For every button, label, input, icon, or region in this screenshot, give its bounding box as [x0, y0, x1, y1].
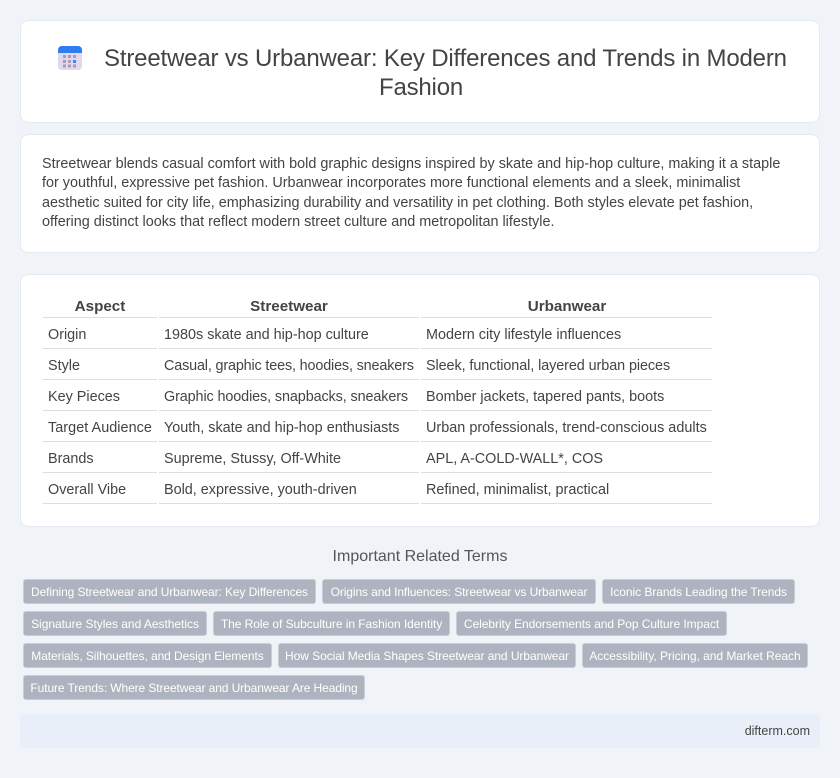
comparison table: Target Audience — [48, 420, 152, 436]
comparison table: Urbanwear — [528, 298, 606, 315]
intro panel — [20, 134, 820, 253]
comparison table: Bold, expressive, youth-driven — [164, 482, 357, 498]
comparison table: Casual, graphic tees, hoodies, sneakers — [164, 358, 414, 374]
related term tags: Materials, Silhouettes, and Design Elements — [31, 649, 264, 663]
comparison table: Style — [48, 358, 80, 374]
title: Fashion — [379, 74, 463, 101]
comparison table: Graphic hoodies, snapbacks, sneakers — [164, 389, 408, 405]
intro text — [42, 156, 780, 230]
comparison table: Urban professionals, trend-conscious adults — [426, 420, 707, 436]
title: Streetwear vs Urbanwear: Key Differences and Trends in Modern — [104, 45, 787, 72]
header card — [20, 20, 820, 123]
comparison table — [43, 298, 712, 504]
related term tags: Celebrity Endorsements and Pop Culture Impact — [464, 617, 719, 631]
comparison table: Streetwear — [250, 298, 328, 315]
comparison table: Origin — [48, 327, 86, 343]
intro text: offering distinct looks that reflect modern street culture and metropolitan lifestyle. — [42, 214, 554, 230]
related term tags: Accessibility, Pricing, and Market Reach — [589, 649, 801, 663]
comparison table: Modern city lifestyle influences — [426, 327, 621, 343]
comparison table: Supreme, Stussy, Off-White — [164, 451, 341, 467]
comparison table: Sleek, functional, layered urban pieces — [426, 358, 670, 374]
related term tags: Defining Streetwear and Urbanwear: Key Differences — [31, 585, 308, 599]
comparison table: Refined, minimalist, practical — [426, 482, 609, 498]
table panel — [20, 274, 820, 527]
related term tags: The Role of Subculture in Fashion Identity — [221, 617, 442, 631]
comparison table: Overall Vibe — [48, 482, 126, 498]
related term tags: Future Trends: Where Streetwear and Urbanwear Are Heading — [30, 681, 358, 695]
intro text: for youthful, expressive pet fashion. Urbanwear incorporates more functional elements and a sleek, minimalist — [42, 175, 740, 191]
related term tags: Iconic Brands Leading the Trends — [610, 585, 787, 599]
related term tags: Origins and Influences: Streetwear vs Urbanwear — [331, 585, 587, 599]
footer bar — [20, 714, 820, 748]
related term tags: Signature Styles and Aesthetics — [31, 617, 199, 631]
footer text: difterm.com — [745, 724, 810, 738]
intro text: aesthetic suited for city life, emphasizing durability and versatility in pet clothing. Both styles elevate pet fashion, — [42, 195, 753, 211]
comparison table: Key Pieces — [48, 389, 120, 405]
comparison table: Aspect — [75, 298, 125, 315]
comparison table: Brands — [48, 451, 94, 467]
related term tags: How Social Media Shapes Streetwear and Urbanwear — [285, 649, 569, 663]
intro text: Streetwear blends casual comfort with bold graphic designs inspired by skate and hip-hop culture, making it a staple — [42, 156, 780, 172]
title — [104, 45, 787, 101]
comparison table: 1980s skate and hip-hop culture — [164, 327, 369, 343]
comparison table: APL, A-COLD-WALL*, COS — [426, 451, 603, 467]
icon: calendar — [58, 46, 82, 70]
related terms heading: Important Related Terms — [333, 548, 507, 565]
comparison table: Bomber jackets, tapered pants, boots — [426, 389, 664, 405]
comparison table: Youth, skate and hip-hop enthusiasts — [164, 420, 399, 436]
related term tags — [23, 579, 808, 700]
